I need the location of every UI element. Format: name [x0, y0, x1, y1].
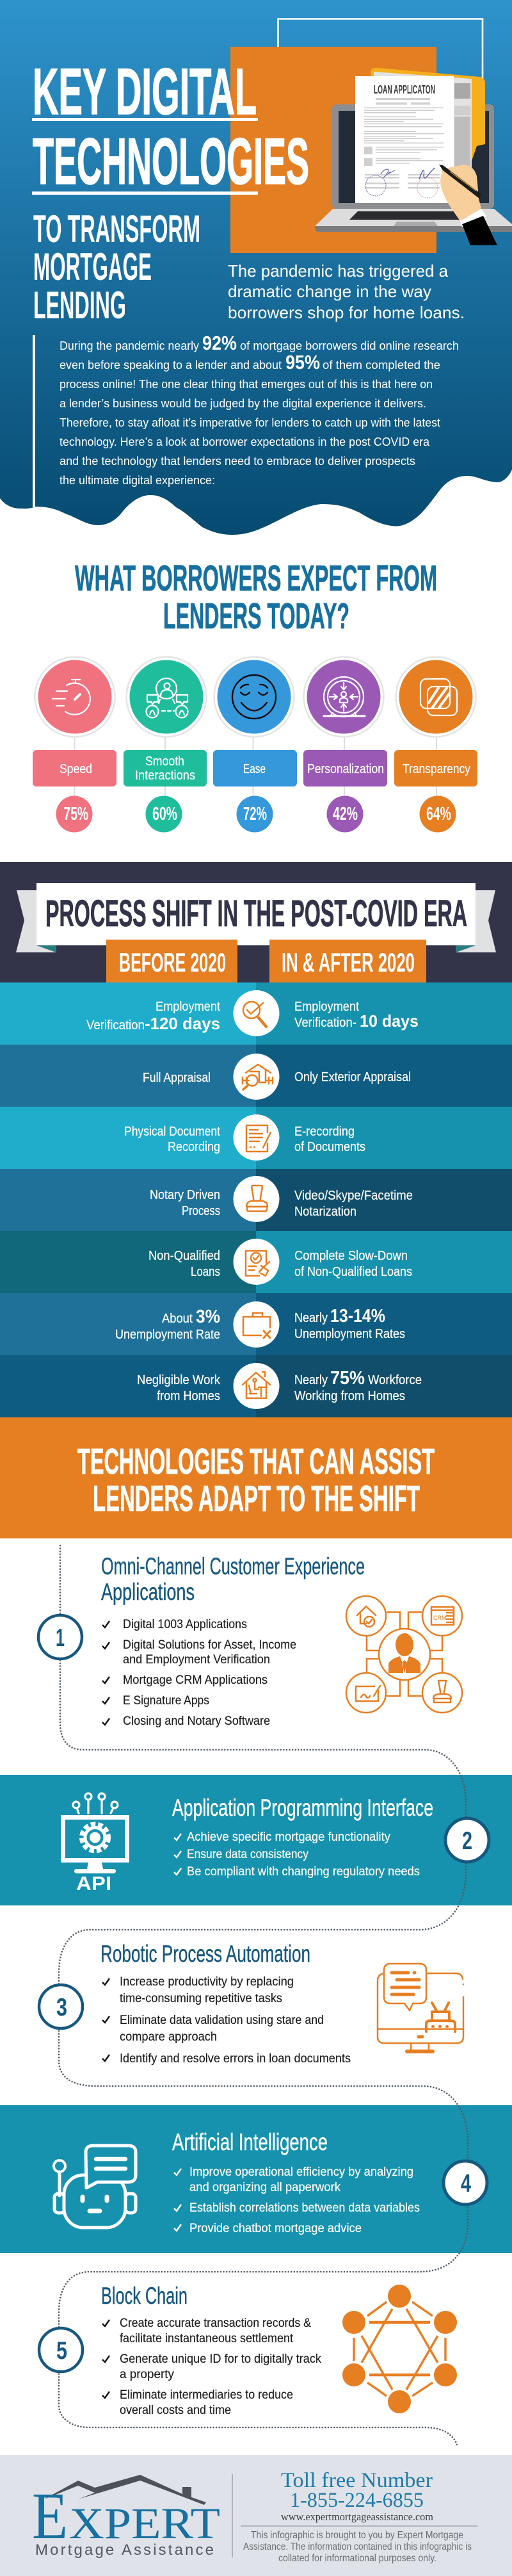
row: work from home	[0, 1355, 512, 1417]
row: document recording: Recording	[168, 1140, 220, 1154]
heading: what borrowers expect	[75, 558, 437, 637]
row: document recording: E-recording	[294, 1125, 355, 1139]
icon: blockchain network	[342, 2285, 457, 2413]
logo: Expert Mortgage Assistance: Mortgage Assistance	[35, 2541, 214, 2559]
row: notary: Process	[182, 1204, 220, 1218]
expectation: personalization: 42%	[333, 804, 358, 824]
disclaimer: This infographic is brought to you by Expert Mortgage	[251, 2530, 463, 2541]
bullet list: compare approach	[120, 2030, 217, 2044]
expectation: smooth interactions: Interactions	[135, 769, 195, 783]
contact information: 1-855-224-6855	[290, 2489, 424, 2512]
intro text block: process online! The one clear thing that emerges out of this is that here on	[60, 377, 433, 391]
row: unemployment: Nearly	[294, 1311, 328, 1325]
expectation: smooth interactions: 60%	[152, 804, 177, 824]
row: work from home: 75%	[330, 1368, 365, 1389]
subtitle	[33, 208, 200, 327]
bullet list: Be compliant with changing regulatory needs	[187, 1864, 420, 1879]
white outline frame behind illustration	[278, 19, 483, 83]
expectation: speed	[33, 657, 116, 833]
number badge 1	[38, 1615, 82, 1659]
bullet list: Closing and Notary Software	[123, 1714, 270, 1728]
band: artificial intelligence	[0, 2105, 512, 2253]
bullet list: Digital 1003 Applications	[123, 1617, 247, 1631]
bullet list: Mortgage CRM Applications	[123, 1673, 268, 1687]
bullet list: Ensure data consistency	[187, 1847, 308, 1861]
row: work from home: Nearly	[294, 1373, 328, 1387]
bullet list: a property	[120, 2367, 174, 2381]
connector lines	[74, 737, 437, 795]
bullet list	[174, 1830, 420, 1879]
row: unemployment: About	[162, 1312, 193, 1326]
contact information: Toll free Number	[281, 2469, 433, 2492]
icon: briefcase with cross	[243, 1313, 270, 1338]
row: employment verification: 10 days	[360, 1011, 419, 1031]
bullet list: Eliminate data validation using stare and	[120, 2013, 324, 2027]
row: unemployment: Unemployment Rate	[115, 1328, 220, 1342]
orange block behind laptop	[230, 47, 436, 253]
row: non-qualified loans: Loans	[191, 1265, 220, 1279]
step 3: robotic process automation	[39, 1941, 463, 2066]
bullet list	[174, 2165, 420, 2235]
disclaimer: collated for informational purposes only.	[278, 2553, 436, 2564]
row: employment verification: Verification-	[294, 1016, 356, 1030]
expectation: transparency: 64%	[426, 804, 451, 824]
row: work from home: Workforce	[368, 1373, 422, 1387]
row: employment verification: Employment	[156, 1000, 220, 1014]
title	[32, 55, 309, 198]
step heading: Robotic Process Automation	[100, 1941, 310, 1967]
row: non-qualified loans: of Non-Qualified Loans	[294, 1265, 412, 1279]
expectation: speed: 75%	[64, 804, 88, 824]
bullet list: Eliminate intermediaries to reduce	[120, 2388, 293, 2402]
row: non-qualified loans: Complete Slow-Down	[294, 1249, 408, 1263]
logo: Expert Mortgage Assistance: E	[32, 2479, 68, 2553]
icon: magnifier check	[243, 1002, 266, 1027]
row: appraisal: Only Exterior Appraisal	[294, 1070, 411, 1084]
disclaimer	[243, 2530, 472, 2564]
row: work from home: Working from Homes	[294, 1389, 405, 1403]
step 4: artificial intelligence	[54, 2129, 487, 2235]
band: API	[0, 1775, 512, 1905]
tagline: borrowers shop for home loans.	[228, 303, 465, 322]
icon: smiley face	[232, 675, 276, 719]
row: employment verification: Employment	[294, 1000, 359, 1014]
panel: process shift dark header	[0, 862, 512, 982]
row: unemployment	[0, 1293, 512, 1355]
icon: approved document	[246, 1251, 269, 1276]
logo: Expert Mortgage Assistance: XPERT	[69, 2499, 220, 2548]
subtitle: LENDING	[33, 284, 126, 327]
step heading: Applications	[101, 1579, 195, 1605]
panel: borrower expectations	[33, 657, 477, 833]
number badge 2	[445, 1818, 489, 1862]
bullet list: Identify and resolve errors in loan documents	[120, 2051, 351, 2066]
expectation: ease	[213, 657, 297, 833]
icon: API monitor	[63, 1793, 127, 1895]
row: non-qualified loans: Non-Qualified	[148, 1249, 220, 1263]
intro text block: even before speaking to a lender and about	[60, 358, 282, 371]
icon: people network	[146, 678, 188, 717]
intro text block: of them completed the	[323, 358, 440, 371]
icon: stamp	[246, 1186, 268, 1211]
subtitle: TO TRANSFORM	[33, 208, 200, 250]
intro text block: of mortgage borrowers did online research	[240, 339, 459, 352]
heading: what borrowers expect: LENDERS TODAY?	[163, 596, 349, 637]
intro text block: and the technology that lenders need to embrace to deliver prospects	[60, 454, 415, 468]
bullet list: E Signature Apps	[123, 1693, 209, 1708]
icon: overlapping squares	[420, 679, 457, 715]
icon: person target	[324, 677, 365, 717]
bullet list: Achieve specific mortgage functionality	[187, 1830, 390, 1844]
number badge 4: 4	[461, 2170, 471, 2197]
icon: API monitor: API	[76, 1872, 111, 1895]
title: KEY DIGITAL	[33, 55, 257, 128]
row: notary	[0, 1169, 512, 1231]
number badge 2: 2	[462, 1827, 472, 1855]
number badge 5	[39, 2328, 83, 2372]
number badge 1: 1	[56, 1624, 65, 1652]
small stamp	[433, 1681, 451, 1702]
icon: house appraisal	[243, 1064, 273, 1089]
contact information	[241, 2469, 477, 2526]
person in hub	[388, 1633, 420, 1673]
icon: home office	[243, 1372, 270, 1398]
step heading: Omni-Channel Customer Experience	[101, 1553, 365, 1579]
intro text block: 95%	[285, 351, 320, 373]
row: employment verification: -120 days	[145, 1014, 220, 1033]
tab: in and after 2020	[269, 940, 426, 982]
bullet list: Increase productivity by replacing	[120, 1975, 294, 1989]
bullet list	[102, 1975, 351, 2066]
step heading: Block Chain	[101, 2283, 188, 2309]
tab: before 2020	[106, 940, 237, 982]
tagline: dramatic change in the way	[228, 282, 431, 301]
icon: robot chat on monitor	[378, 1964, 463, 2051]
expectation: personalization: Personalization	[307, 762, 384, 776]
small house	[357, 1606, 376, 1627]
step 1: omni-channel	[38, 1553, 462, 1728]
expectation: transparency: Transparency	[403, 762, 470, 776]
number badge 5: 5	[56, 2337, 67, 2365]
expectation: transparency	[394, 657, 477, 833]
intro text block: the ultimate digital experience:	[60, 473, 215, 487]
row: work from home: Negligible Work	[137, 1373, 221, 1387]
tab: before 2020: BEFORE 2020	[119, 947, 226, 977]
row: notary: Notary Driven	[150, 1188, 220, 1202]
panel: footer	[0, 2455, 512, 2576]
number badge 3: 3	[56, 1994, 67, 2021]
bullet list: Establish correlations between data variables	[189, 2201, 420, 2215]
row: document recording	[0, 1107, 512, 1169]
row: appraisal: Full Appraisal	[143, 1071, 211, 1085]
bullet list	[102, 1617, 296, 1728]
row: notary: Notarization	[294, 1205, 356, 1219]
icon: customer hub	[346, 1596, 462, 1713]
expectation: ease: 72%	[243, 804, 267, 824]
expectation: personalization	[303, 657, 387, 833]
tagline	[228, 261, 465, 322]
row: unemployment: 13-14%	[330, 1306, 385, 1326]
step 2: application programming interface	[63, 1793, 489, 1895]
bullet list: Improve operational efficiency by analyzing	[189, 2165, 413, 2179]
bullet list: facilitate instantaneous settlement	[120, 2331, 294, 2345]
bullet list: and organizing all paperwork	[189, 2180, 340, 2194]
bullet list: time-consuming repetitive tasks	[120, 1991, 282, 2005]
expectation: speed: Speed	[60, 762, 92, 776]
subtitle: MORTGAGE	[33, 245, 152, 288]
ribbon banner with heading	[16, 883, 496, 952]
expectation: ease: Ease	[243, 762, 266, 776]
bullet list: Create accurate transaction records &	[120, 2316, 311, 2330]
divider	[232, 2474, 233, 2557]
illustration: laptop with loan application	[315, 68, 512, 245]
icon: document and pencil	[246, 1125, 271, 1152]
row: employment verification: Verification	[86, 1018, 145, 1032]
panel: hero header with wavy bottom	[0, 0, 512, 535]
row: document recording: Physical Document	[124, 1125, 220, 1139]
tab: in and after 2020: IN & AFTER 2020	[282, 947, 415, 977]
disclaimer: Assistance. The information contained in this infographic is	[243, 2541, 472, 2552]
document heading: LOAN APPLICATON	[374, 83, 435, 96]
expectation: smooth interactions	[124, 657, 207, 833]
bullet list: Provide chatbot mortgage advice	[189, 2221, 362, 2235]
row: unemployment: 3%	[196, 1307, 220, 1327]
small CRM window: CRM	[433, 1615, 447, 1621]
intro text block: 92%	[202, 332, 237, 354]
intro text block: During the pandemic nearly	[60, 339, 200, 352]
small signature	[356, 1686, 380, 1701]
bullet list: Generate unique ID for to digitally track	[120, 2352, 321, 2366]
intro text block: a lender’s business would be judged by the digital experience it delivers.	[60, 396, 426, 410]
bullet list: and Employment Verification	[123, 1652, 270, 1667]
intro text block: Therefore, to stay afloat it’s imperative for lenders to catch up with the latest	[60, 416, 440, 429]
row: notary: Video/Skype/Facetime	[294, 1189, 413, 1203]
row: employment verification	[0, 982, 512, 1045]
intro text block: technology. Here’s a look at borrower expectations in the post COVID era	[60, 435, 430, 448]
small CRM window	[431, 1607, 454, 1625]
number badge 4	[444, 2161, 487, 2205]
step 5: block chain	[39, 2283, 457, 2417]
bullet list: overall costs and time	[120, 2403, 231, 2417]
row: document recording: of Documents	[294, 1140, 365, 1154]
icon: chatbot	[54, 2146, 136, 2228]
intro text block	[33, 332, 459, 507]
row: work from home: from Homes	[157, 1389, 220, 1403]
row: non-qualified loans	[0, 1231, 512, 1293]
icon: stopwatch	[52, 680, 90, 715]
dotted connector path	[59, 1545, 468, 2445]
bullet list	[102, 2316, 321, 2417]
bullet list: Digital Solutions for Asset, Income	[123, 1638, 296, 1652]
logo: Expert Mortgage Assistance	[32, 2475, 220, 2559]
panel: technologies heading	[0, 1417, 512, 1538]
step heading: Artificial Intelligence	[172, 2129, 328, 2155]
number badge 3	[39, 1985, 83, 2028]
row: unemployment: Unemployment Rates	[294, 1327, 405, 1341]
step heading	[101, 1553, 365, 1605]
contact information: www.expertmortgageassistance.com	[281, 2511, 433, 2523]
tagline: The pandemic has triggered a	[228, 261, 449, 281]
expectation: smooth interactions: Smooth	[145, 754, 184, 769]
row: appraisal	[0, 1045, 512, 1107]
